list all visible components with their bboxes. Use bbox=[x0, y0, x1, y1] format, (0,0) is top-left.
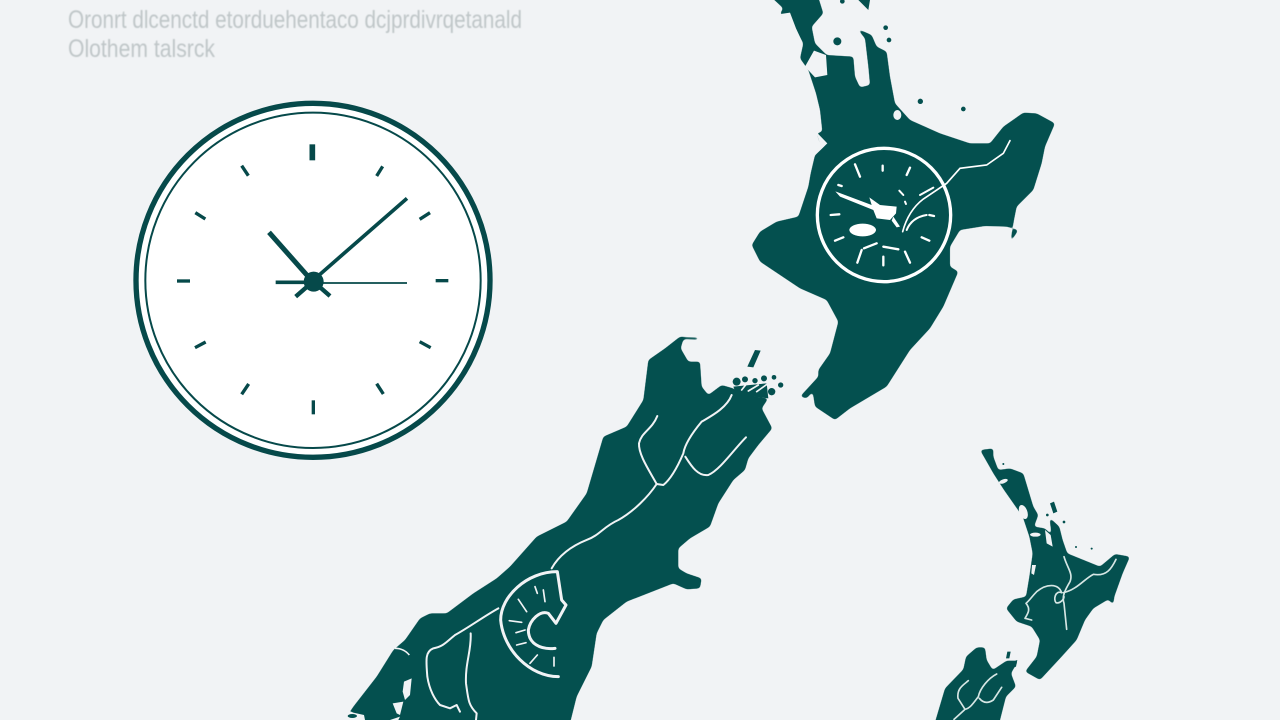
southern coastal islet bbox=[348, 714, 357, 718]
heading text: Oronrt dlcenctd etorduehentaco dcjprdivrqetanald bbox=[68, 6, 522, 34]
route lines bbox=[426, 395, 746, 720]
small map islets bbox=[1002, 463, 1093, 670]
small North Island bbox=[980, 448, 1130, 680]
large South Island map bbox=[333, 337, 783, 720]
Marlborough Sounds islets bbox=[733, 350, 783, 398]
small South Island route lines bbox=[954, 674, 1002, 719]
clock hands bbox=[269, 198, 407, 297]
large clock bbox=[136, 103, 490, 457]
small South Island bbox=[932, 647, 1018, 720]
small map route lines bbox=[1025, 557, 1116, 629]
inset clock on South Island bbox=[501, 572, 566, 677]
clock hour ticks bbox=[177, 144, 448, 414]
small New Zealand map bbox=[932, 448, 1130, 720]
small map cut-outs bbox=[998, 478, 1053, 575]
harbour cut-outs bbox=[781, 13, 901, 155]
heading text: Olothem talsrck bbox=[68, 35, 215, 63]
Fiordland cut-outs bbox=[340, 678, 412, 720]
large North Island map bbox=[752, 0, 1055, 420]
inset clock on North Island bbox=[817, 141, 1010, 282]
inset clock hand bbox=[835, 191, 897, 220]
sounds gaps bbox=[742, 382, 768, 392]
heading text bbox=[68, 6, 522, 63]
offshore islets bbox=[833, 0, 966, 111]
